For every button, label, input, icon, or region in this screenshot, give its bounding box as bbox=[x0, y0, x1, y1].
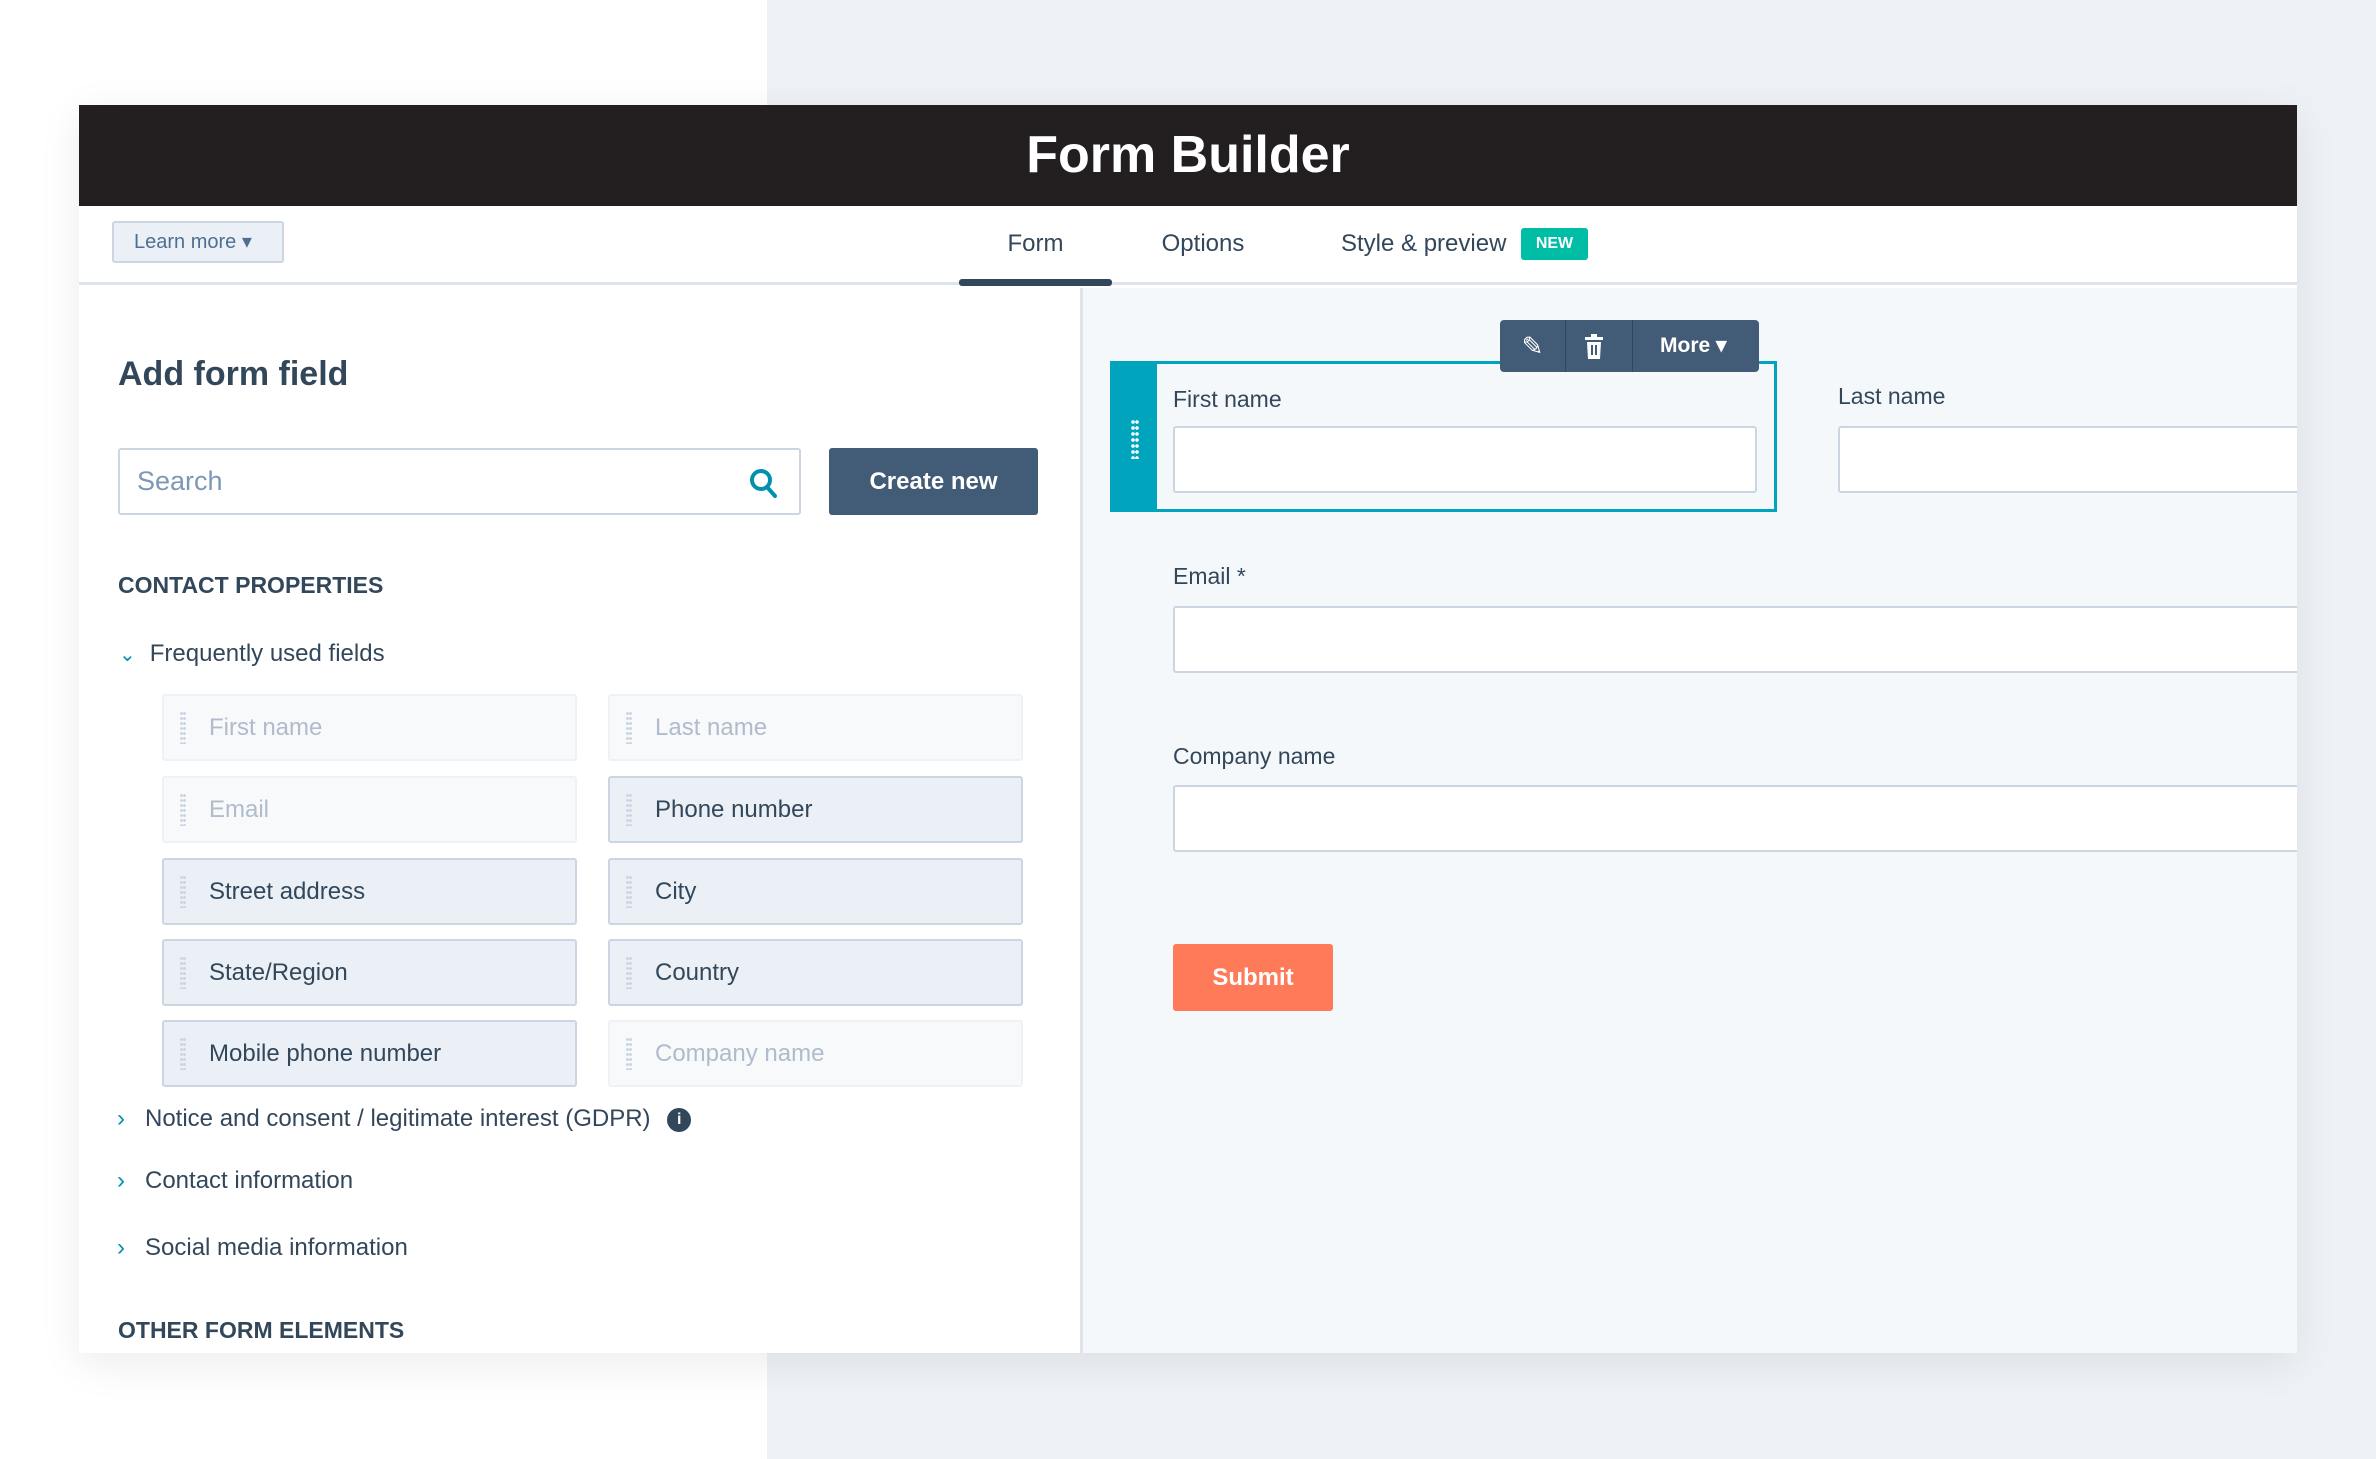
drag strip bbox=[1110, 361, 1157, 512]
right panel bbox=[1080, 288, 2297, 1353]
heading: Add form field: Add form field bbox=[118, 355, 348, 393]
tab: Options: Options bbox=[1162, 230, 1244, 257]
icon: trash bbox=[1585, 334, 1603, 359]
field: Company name bbox=[1173, 743, 2297, 852]
collapsed sections: › Social media information bbox=[117, 1234, 408, 1261]
fields grid: Country bbox=[655, 959, 739, 986]
collapsed sections: i bbox=[677, 1111, 681, 1128]
fields grid bbox=[162, 694, 1023, 1087]
collapsed sections: › Notice and consent / legitimate interest (GDPR) bbox=[117, 1105, 651, 1132]
selected field: First name: First name bbox=[1173, 386, 1282, 412]
create new button: Create new bbox=[869, 468, 998, 495]
Frequently used fields: ⌄ Frequently used fields bbox=[119, 640, 385, 667]
fields grid: Street address bbox=[209, 878, 365, 905]
icon: search bbox=[750, 469, 778, 498]
field: Company name: Company name bbox=[1173, 743, 1335, 769]
selected field: First name bbox=[1110, 361, 1777, 512]
fields grid: Last name bbox=[655, 714, 767, 741]
fields grid: Email bbox=[209, 796, 269, 823]
fields grid: Mobile phone number bbox=[209, 1040, 441, 1067]
fields grid: City bbox=[655, 878, 696, 905]
tab bar bbox=[79, 206, 2297, 285]
title bar bbox=[79, 105, 2297, 206]
learn more button bbox=[112, 221, 284, 263]
submit button: Submit bbox=[1212, 964, 1294, 991]
NEW badge bbox=[1521, 228, 1588, 260]
submit button bbox=[1173, 944, 1333, 1011]
collapsed sections: › Contact information bbox=[117, 1167, 353, 1194]
icon: pencil: ✎ bbox=[1522, 331, 1543, 361]
collapsed sections bbox=[117, 1105, 691, 1261]
fields grid: Phone number bbox=[655, 796, 812, 823]
fields grid: First name bbox=[209, 714, 322, 741]
icon: pencil bbox=[1500, 320, 1566, 372]
field: Last name: Last name bbox=[1838, 383, 1945, 409]
NEW badge: NEW bbox=[1536, 235, 1573, 252]
toolbar bbox=[1500, 320, 1759, 372]
fields grid: State/Region bbox=[209, 959, 348, 986]
title bar: Form Builder bbox=[1026, 126, 1350, 184]
left panel bbox=[118, 355, 1038, 667]
learn more button: Learn more ▾ bbox=[134, 231, 252, 253]
create new button bbox=[829, 448, 1038, 515]
fields grid: Company name bbox=[655, 1040, 824, 1067]
tab: Style & preview: Style & preview bbox=[1341, 230, 1506, 257]
background right half bbox=[767, 0, 2376, 1459]
search box bbox=[118, 448, 801, 515]
section: OTHER FORM ELEMENTS: OTHER FORM ELEMENTS bbox=[118, 1317, 404, 1343]
main card bbox=[79, 105, 2297, 1353]
field: Email bbox=[1173, 563, 2297, 673]
field: Last name bbox=[1838, 383, 2297, 493]
toolbar: More ▾ bbox=[1660, 334, 1727, 357]
tab underline bbox=[959, 279, 1112, 286]
search box: Search bbox=[137, 466, 223, 496]
section: CONTACT PROPERTIES: CONTACT PROPERTIES bbox=[118, 572, 383, 598]
field: Email: Email * bbox=[1173, 563, 1246, 589]
tab: Form: Form bbox=[1008, 230, 1064, 257]
